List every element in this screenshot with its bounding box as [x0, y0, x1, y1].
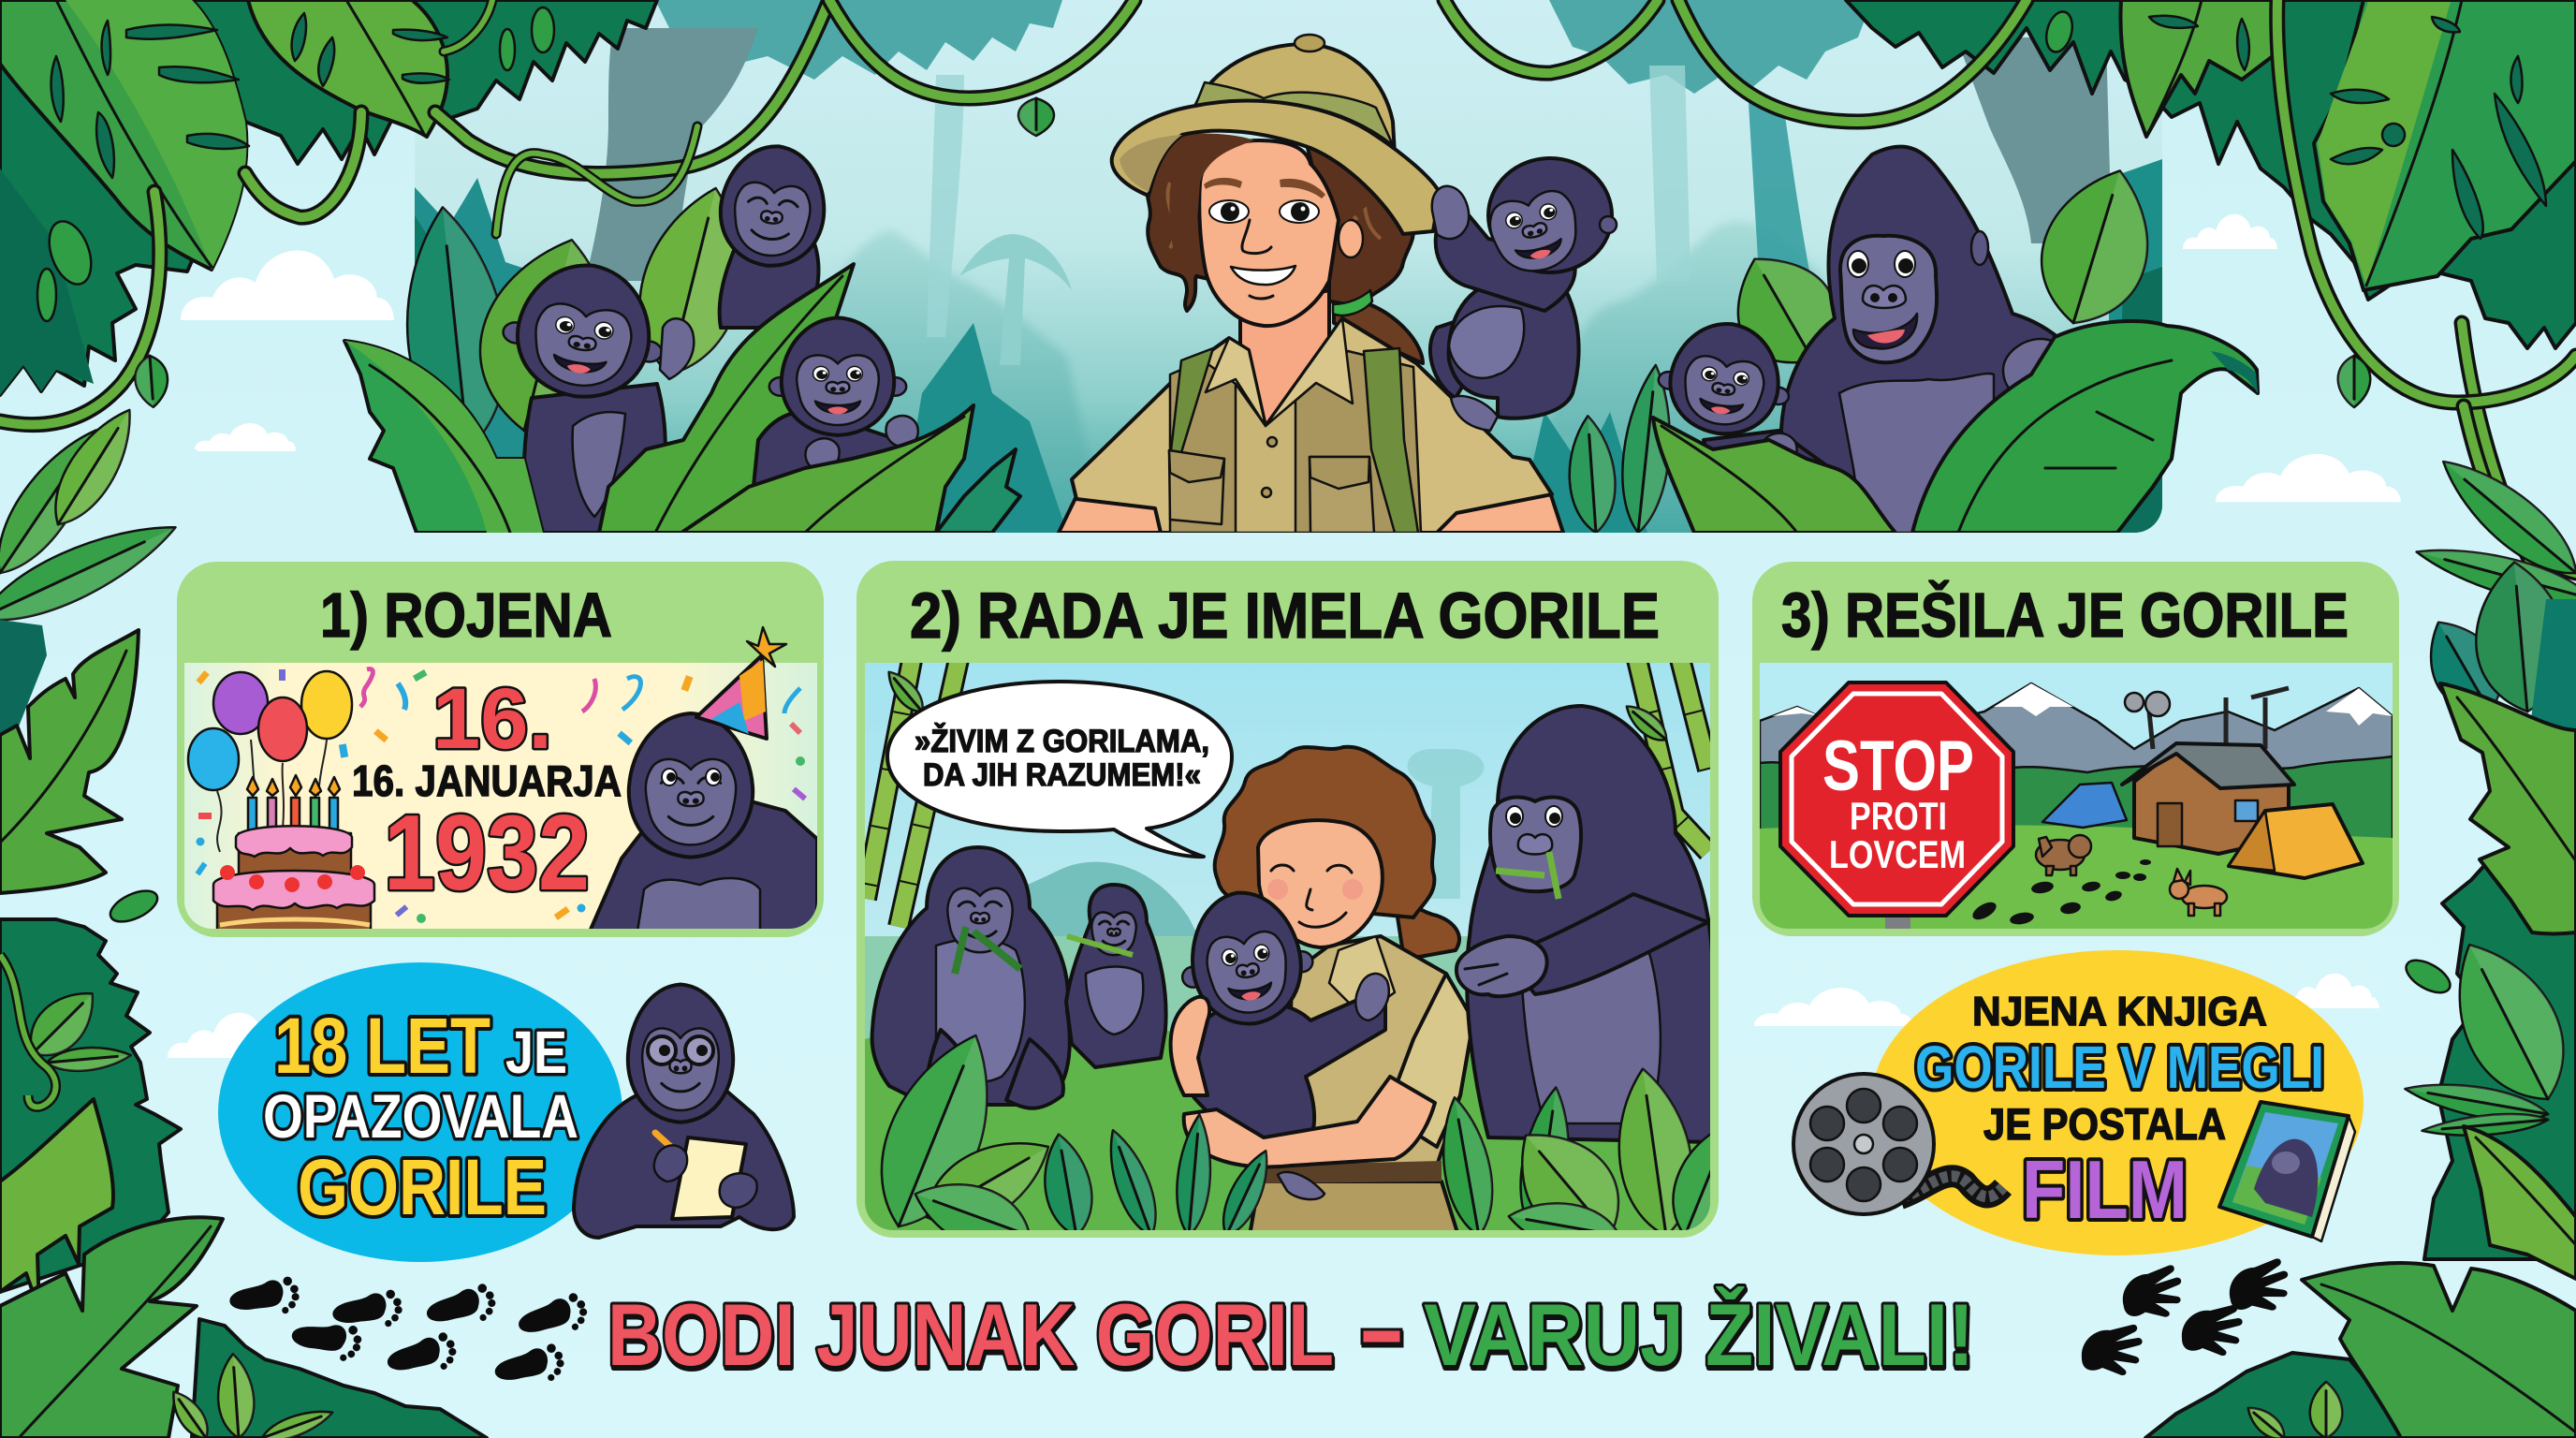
shirt	[1072, 318, 1552, 533]
panel 1: born	[177, 562, 824, 937]
callout text lines: FILM	[2022, 1143, 2188, 1236]
gorilla: top peeking	[715, 141, 830, 328]
big standing gorilla	[1456, 706, 1713, 1142]
hair	[1215, 747, 1434, 917]
braid	[1395, 899, 1459, 960]
arms	[1184, 1077, 1435, 1167]
callout: book and film	[1793, 950, 2364, 1255]
right side foliage	[2145, 443, 2576, 1438]
neck	[1240, 290, 1329, 426]
front hero leaf and plant	[681, 405, 1020, 533]
hair back	[1147, 136, 1423, 363]
hero explorer woman	[1059, 35, 1563, 533]
callout text lines	[1915, 989, 2324, 1236]
monstera leaf B	[248, 0, 447, 137]
callout text lines: GORILE V MEGLI	[1915, 1034, 2324, 1101]
speech bubble	[887, 682, 1232, 857]
left side foliage	[0, 398, 487, 1438]
confetti	[196, 669, 807, 923]
straps	[1170, 348, 1418, 533]
date text: 16.	[432, 671, 552, 767]
animals	[2036, 835, 2227, 916]
callout text lines: NJENA KNJIGA	[1972, 989, 2267, 1034]
balloons	[188, 671, 352, 852]
party gorilla	[590, 713, 817, 932]
forest scene	[856, 655, 1758, 1263]
panel 2: loved gorillas	[856, 561, 1758, 1263]
monstera leaf A	[0, 0, 246, 270]
callout text	[263, 1002, 578, 1231]
woman with baby gorilla	[1171, 747, 1473, 1236]
callout text lines: JE POSTALA	[1983, 1099, 2226, 1149]
bamboo	[866, 655, 1708, 927]
clouds	[168, 214, 2401, 1058]
hero characters and leaves	[344, 35, 2258, 536]
gorilla: left peeking	[496, 255, 694, 533]
party hat	[696, 627, 786, 739]
placket	[1236, 384, 1295, 533]
pockets	[1169, 450, 1374, 533]
gorilla with notebook	[574, 985, 794, 1238]
callout text: GORILE	[298, 1143, 547, 1231]
monstera leaf C	[2314, 0, 2576, 290]
antennas	[2125, 688, 2289, 749]
stop sign	[1780, 682, 2013, 932]
heading 1: 1) ROJENA	[320, 580, 612, 651]
tree line	[1760, 756, 2393, 847]
vines	[0, 0, 2576, 573]
footprints left	[229, 1277, 590, 1385]
top-left jungle canopy	[0, 0, 657, 395]
bottom slogan	[607, 1285, 1974, 1384]
right small gorilla	[1657, 322, 1827, 464]
gorilla: middle on leaf	[752, 316, 919, 484]
speech bubble: DA JIH RAZUMEM!«	[923, 757, 1201, 793]
bottom slogan: BODI JUNAK GORIL	[607, 1285, 1334, 1384]
callout text: OPAZOVALA	[263, 1081, 578, 1151]
callout text: JE	[505, 1019, 567, 1086]
callout: 18 years	[218, 962, 794, 1262]
sitting gorilla	[872, 847, 1070, 1113]
baby gorilla climbing on shoulder	[1430, 158, 1617, 431]
gorilla footprints	[1969, 859, 2151, 926]
baby gorilla hugged	[1172, 884, 1389, 1199]
cabin	[2122, 743, 2294, 854]
second sitting gorilla	[1066, 885, 1166, 1067]
date text	[352, 671, 622, 913]
stop sign: STOP	[1822, 726, 1974, 806]
vest	[1170, 351, 1421, 533]
mountains	[1760, 683, 2393, 805]
blue tent	[2042, 783, 2127, 828]
cake	[213, 775, 374, 936]
foreground plants	[856, 1019, 1758, 1263]
silverback gorilla	[1779, 144, 2057, 533]
safari hat	[1112, 35, 1440, 234]
callout text: 18 LET	[274, 1002, 490, 1090]
panel 3: saved gorillas	[1752, 562, 2399, 936]
handprints right	[2082, 1257, 2292, 1375]
big hero leaves left	[344, 264, 854, 533]
face	[1258, 820, 1383, 947]
arms	[1059, 492, 1563, 533]
hero big leaves right	[1653, 321, 2258, 533]
grass	[1760, 825, 2393, 929]
hero jungle backdrop	[415, 0, 2162, 533]
right hero back plants	[1565, 155, 2170, 536]
speech bubble: »ŽIVIM Z GORILAMA,	[915, 724, 1209, 759]
top-right jungle canopy	[1846, 0, 2576, 348]
book	[2219, 1102, 2355, 1241]
face	[1199, 140, 1339, 326]
birthday scene	[184, 663, 817, 936]
film reel	[1793, 1074, 2003, 1214]
monstera leaf D	[2120, 0, 2273, 137]
pants	[1250, 1181, 1458, 1236]
stop sign: PROTI	[1850, 794, 1947, 838]
stop sign: LOVCEM	[1829, 832, 1966, 876]
heading 2: 2) RADA JE IMELA GORILE	[910, 580, 1660, 652]
heading 3: 3) REŠILA JE GORILE	[1781, 580, 2349, 651]
shirt	[1287, 936, 1473, 1180]
date text: 16. JANUARJA	[352, 756, 622, 805]
bottom slogan: VARUJ ŽIVALI!	[1424, 1285, 1974, 1384]
date text: 1932	[384, 794, 590, 913]
camp scene	[1760, 663, 2393, 932]
back leaves left	[406, 187, 732, 433]
collars	[1206, 318, 1353, 426]
yellow tent	[2229, 804, 2363, 878]
